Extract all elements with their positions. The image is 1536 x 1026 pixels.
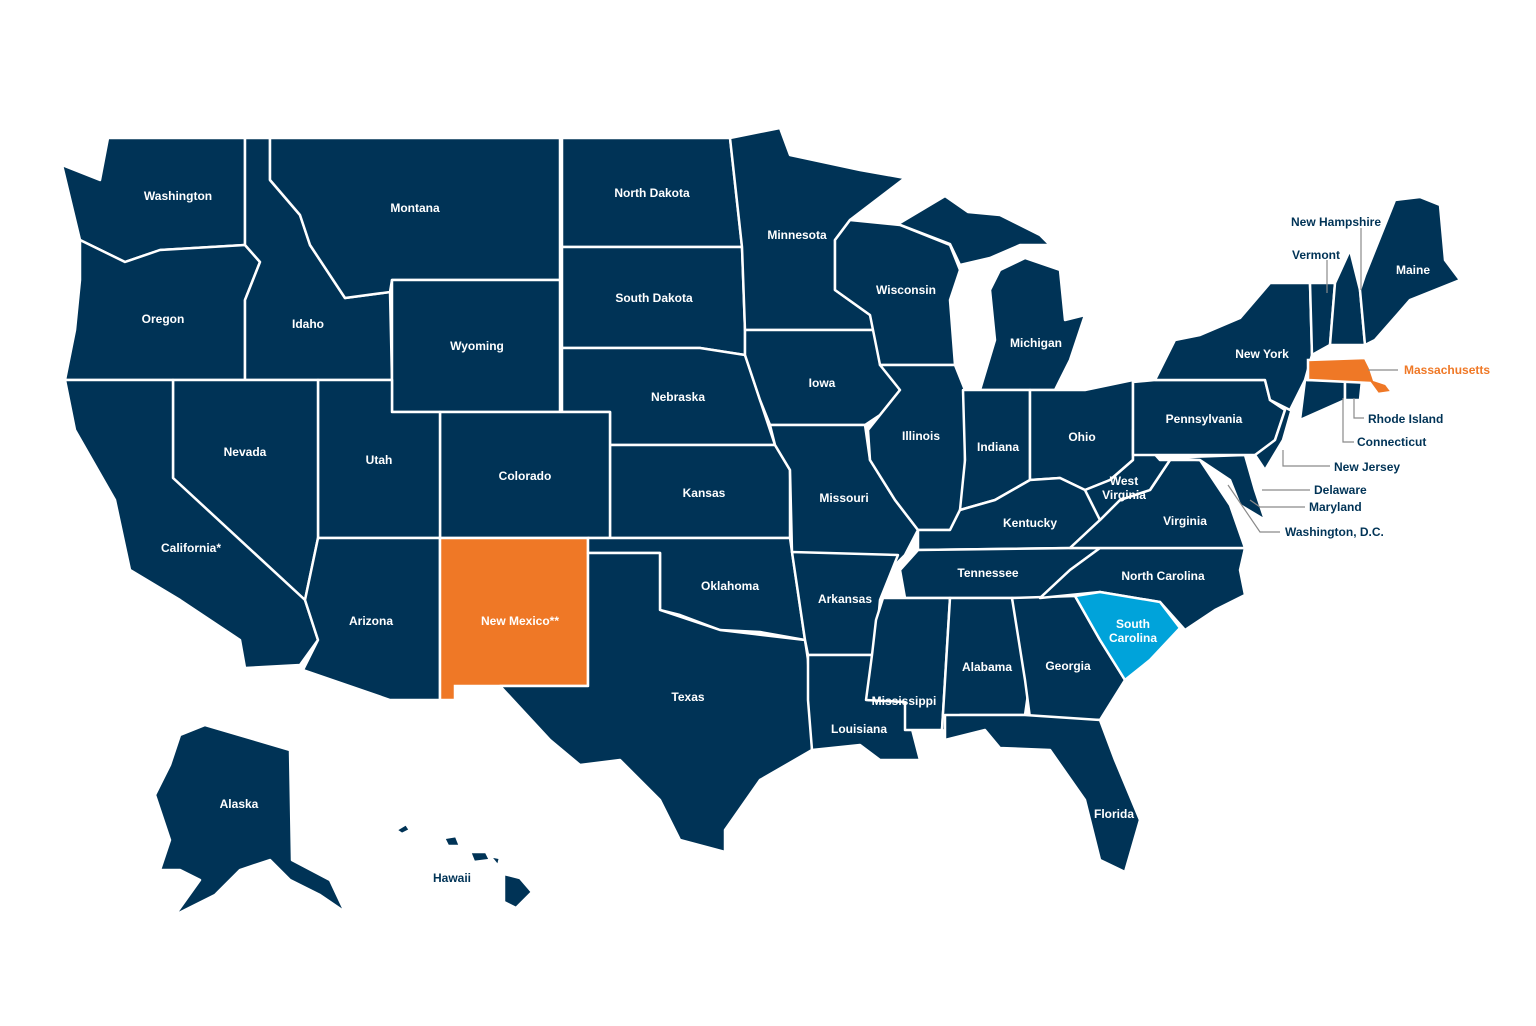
- state labels: Illinois: [902, 429, 940, 443]
- state labels: Minnesota: [767, 228, 827, 242]
- state: Wisconsin: [835, 220, 960, 365]
- state labels: Virginia: [1163, 514, 1207, 528]
- state: Alabama: [942, 598, 1030, 735]
- state: Wyoming: [392, 280, 560, 412]
- state labels: California*: [161, 541, 221, 555]
- state labels: Michigan: [1010, 336, 1062, 350]
- state: Washington: [62, 138, 245, 262]
- state labels: Montana: [390, 201, 440, 215]
- state: New Hampshire: [1330, 250, 1365, 345]
- state labels: North Carolina: [1121, 569, 1205, 583]
- state: Tennessee: [900, 548, 1100, 598]
- state labels: Alaska: [220, 797, 259, 811]
- state: Alaska: [155, 725, 345, 915]
- state labels: Kansas: [683, 486, 726, 500]
- callout labels: Rhode Island: [1368, 412, 1443, 426]
- state: Connecticut: [1300, 380, 1345, 420]
- state: Rhode Island: [1345, 380, 1362, 400]
- state: North Dakota: [562, 138, 742, 247]
- state: West Virginia: [1085, 430, 1170, 520]
- state labels: Georgia: [1045, 659, 1091, 673]
- state: Colorado: [440, 412, 610, 538]
- state labels: Iowa: [809, 376, 836, 390]
- callout labels: New Jersey: [1334, 460, 1400, 474]
- state: Hawaii: [396, 824, 532, 908]
- state: South Carolina: [1075, 592, 1180, 680]
- state labels: Nevada: [224, 445, 267, 459]
- state: Massachusetts: [1308, 358, 1392, 394]
- state labels: Indiana: [977, 440, 1019, 454]
- state labels: Virginia: [1102, 488, 1146, 502]
- state: Minnesota: [730, 128, 905, 330]
- state: Florida: [945, 715, 1140, 872]
- state: Pennsylvania: [1133, 380, 1285, 455]
- state labels: Missouri: [819, 491, 869, 505]
- state: Indiana: [960, 390, 1030, 510]
- callout labels: [1285, 215, 1490, 539]
- state: California: [65, 380, 318, 668]
- callout lines: northeast: [1228, 228, 1398, 532]
- state: Arkansas: [792, 552, 898, 655]
- state labels: Pennsylvania: [1166, 412, 1243, 426]
- state: Oregon: [65, 240, 260, 380]
- state labels: Oklahoma: [701, 579, 759, 593]
- state labels: New York: [1235, 347, 1289, 361]
- state: Maryland/Delaware: [1160, 455, 1265, 520]
- state: Arizona: [303, 538, 440, 700]
- state labels: Hawaii: [433, 871, 471, 885]
- state: New Jersey: [1255, 400, 1293, 470]
- state labels: Utah: [366, 453, 392, 467]
- state labels: West: [1110, 474, 1138, 488]
- map: united states: [62, 128, 1460, 915]
- state labels: Nebraska: [651, 390, 705, 404]
- callout labels: Delaware: [1314, 483, 1367, 497]
- state: New Mexico: [440, 538, 588, 700]
- state: Mississippi: [866, 598, 950, 730]
- state: Utah: [318, 380, 440, 538]
- callout labels: Vermont: [1292, 248, 1340, 262]
- state: South Dakota: [562, 247, 745, 355]
- state labels: Wisconsin: [876, 283, 936, 297]
- state labels: Wyoming: [450, 339, 504, 353]
- callout labels: Washington, D.C.: [1285, 525, 1384, 539]
- state: Missouri: [770, 425, 918, 565]
- state: New York: [1155, 283, 1312, 410]
- state labels: [142, 186, 1430, 885]
- state: Idaho: [245, 138, 392, 380]
- state labels: Idaho: [292, 317, 324, 331]
- state: Georgia: [1012, 596, 1125, 720]
- state: Ohio: [1030, 380, 1133, 490]
- state labels: Ohio: [1068, 430, 1096, 444]
- callout labels: Connecticut: [1357, 435, 1426, 449]
- state: Illinois: [868, 365, 965, 530]
- state: Vermont: [1310, 283, 1335, 355]
- state labels: South: [1116, 617, 1150, 631]
- state: Oklahoma: [588, 538, 805, 640]
- state: Texas: [500, 553, 812, 852]
- state labels: Oregon: [142, 312, 184, 326]
- callout labels: New Hampshire: [1291, 215, 1381, 229]
- state labels: Maine: [1396, 263, 1430, 277]
- state: Montana: [270, 138, 560, 298]
- state: Maine: [1360, 197, 1460, 345]
- state labels: Arizona: [349, 614, 393, 628]
- state: North Carolina: [1040, 548, 1245, 630]
- state labels: North Dakota: [614, 186, 690, 200]
- state: Kentucky: [918, 478, 1100, 550]
- state: Iowa: [745, 330, 900, 425]
- state labels: Tennessee: [957, 566, 1019, 580]
- state: Nebraska: [562, 348, 775, 445]
- state labels: Alabama: [962, 660, 1012, 674]
- state labels: Carolina: [1109, 631, 1157, 645]
- state labels: Louisiana: [831, 722, 887, 736]
- state labels: Arkansas: [818, 592, 872, 606]
- state labels: Washington: [144, 189, 212, 203]
- callout labels: Maryland: [1309, 500, 1362, 514]
- state: Michigan: [898, 196, 1085, 390]
- state labels: New Mexico**: [481, 614, 559, 628]
- state labels: Texas: [671, 690, 705, 704]
- state labels: Mississippi: [872, 694, 936, 708]
- state labels: Florida: [1094, 807, 1134, 821]
- callout labels: Massachusetts: [1404, 363, 1490, 377]
- state labels: Kentucky: [1003, 516, 1057, 530]
- state labels: South Dakota: [615, 291, 693, 305]
- state: Virginia: [1070, 460, 1245, 548]
- state labels: Colorado: [499, 469, 551, 483]
- state: Kansas: [610, 445, 790, 538]
- state: Louisiana: [808, 655, 920, 760]
- state: Nevada: [173, 380, 318, 600]
